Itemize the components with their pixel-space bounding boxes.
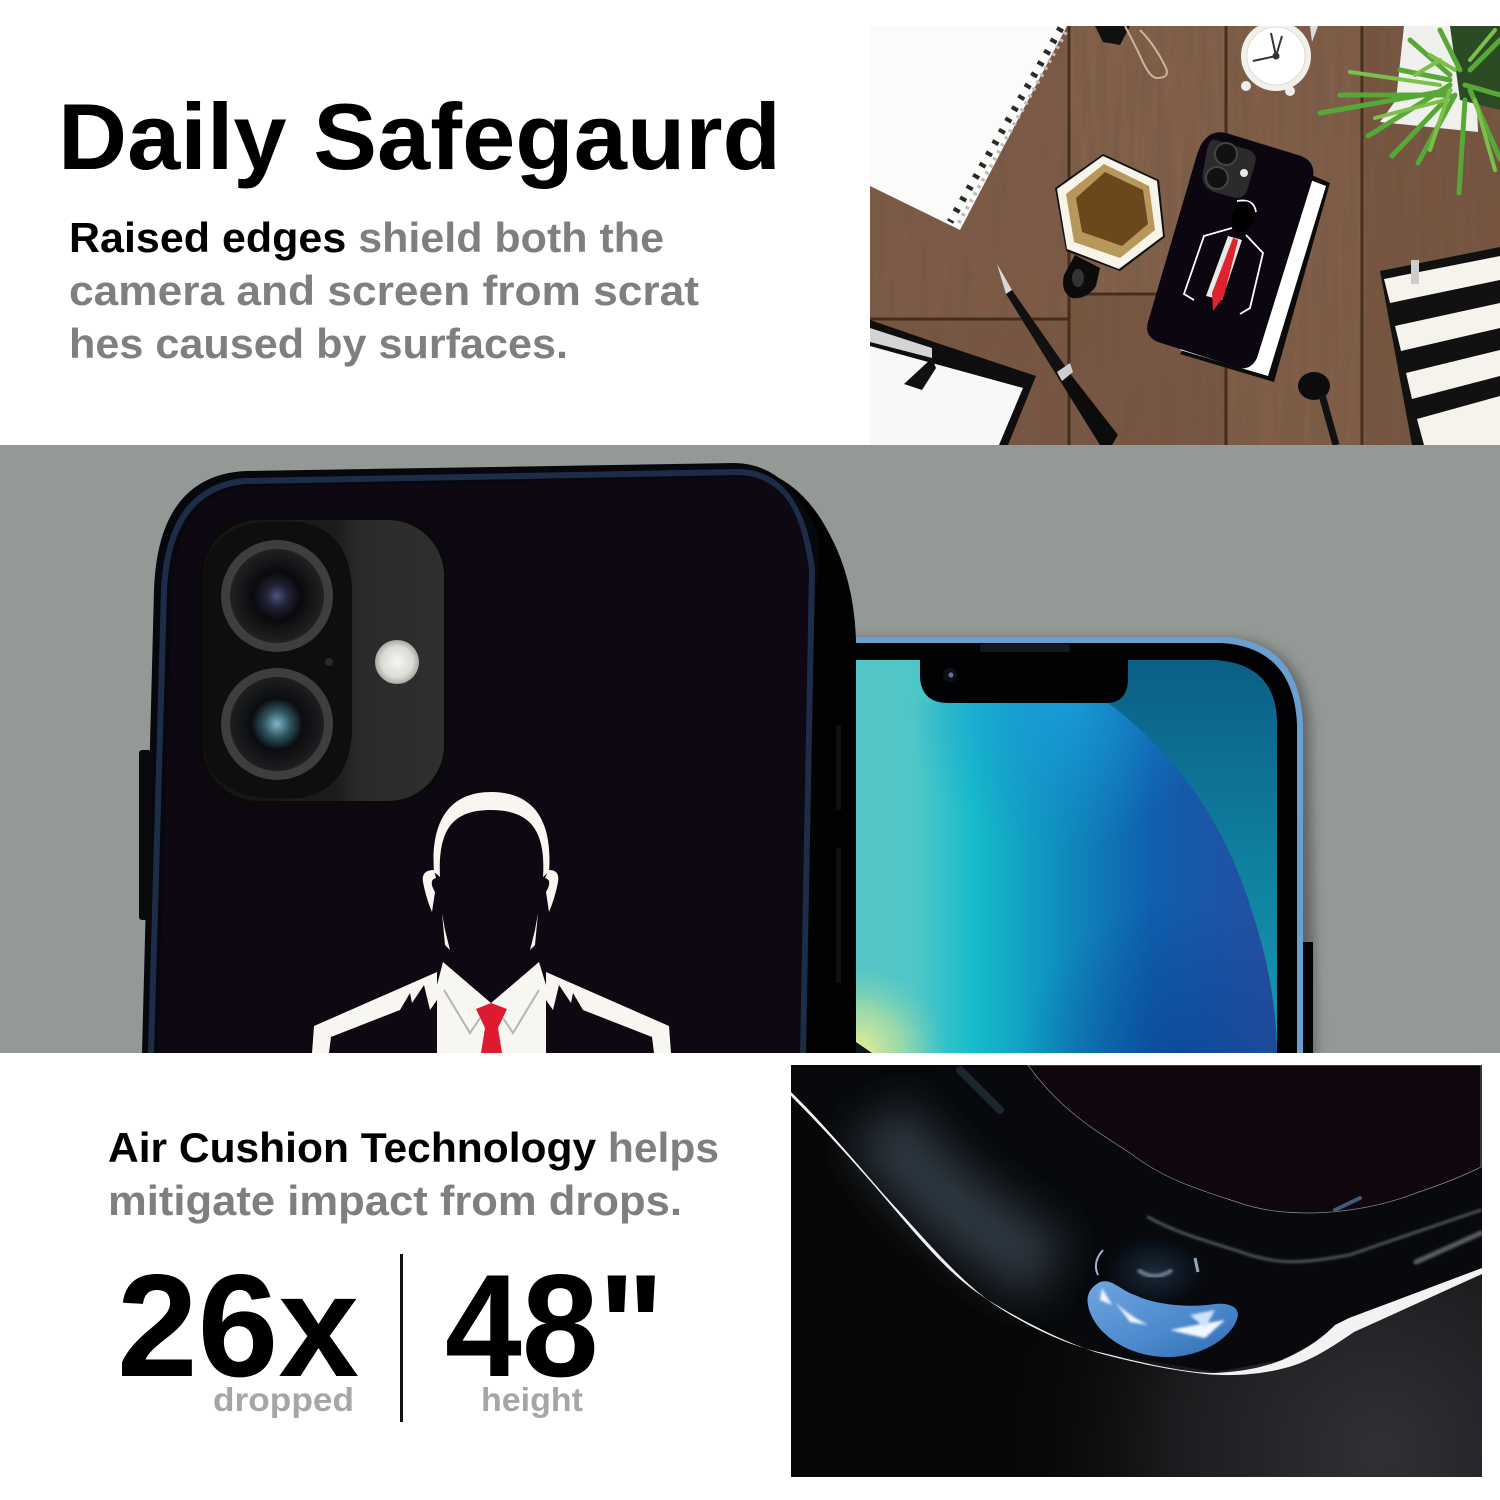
- text block: raised edges: hes caused by surfaces.: [69, 320, 568, 367]
- text block: air cushion: Air Cushion Technology helps: [108, 1124, 719, 1171]
- front phone: [850, 637, 1316, 1060]
- divider: [400, 1254, 403, 1422]
- text block: air cushion: [108, 1124, 719, 1224]
- figure: [1184, 200, 1263, 314]
- bumper sheen: [880, 1120, 1050, 1270]
- device behind: [1180, 170, 1330, 382]
- text block: air cushion: mitigate impact from drops.: [108, 1177, 682, 1224]
- binder clip: [1095, 26, 1167, 78]
- text block: raised edges: Raised edges shield both the: [69, 214, 664, 261]
- figure silhouette: [312, 792, 671, 1053]
- clock: [1241, 21, 1318, 96]
- text block: raised edges: [69, 214, 699, 367]
- camera: [1202, 140, 1256, 198]
- bumper highlights: [960, 1070, 1481, 1262]
- earbud: [1298, 372, 1336, 445]
- camera module: [200, 517, 447, 806]
- stat: 48 inches height: height: [481, 1381, 583, 1418]
- panel: grey band with phones: [0, 445, 1500, 1060]
- pen: [997, 264, 1118, 445]
- back phone: [139, 463, 856, 1053]
- stat: 26x dropped: dropped: [213, 1381, 354, 1418]
- screen: [920, 660, 1277, 1052]
- white rim line: [791, 1092, 1482, 1375]
- small phone on case: [1147, 132, 1330, 382]
- wood planks: [870, 26, 1500, 445]
- case back: [1147, 132, 1313, 368]
- stat: 48 inches height: 48": [445, 1244, 664, 1407]
- stat: 26x dropped: 26x: [117, 1244, 359, 1407]
- water droplet: [1088, 1238, 1238, 1357]
- panel: desk lifestyle photo: [870, 21, 1500, 445]
- text block: raised edges: camera and screen from scrat: [69, 267, 699, 314]
- coffee cup: [1055, 154, 1165, 298]
- title: Daily Safegaurd: [58, 84, 781, 189]
- clipboard: [870, 320, 1036, 445]
- notebook: [870, 26, 1067, 230]
- striped notebook: [1380, 247, 1500, 445]
- screen glass: [1028, 1065, 1481, 1213]
- plant: [1320, 26, 1500, 193]
- red tie: [476, 1003, 507, 1053]
- panel: raised edge close-up: [791, 1065, 1482, 1477]
- bumper body: [1129, 1188, 1482, 1372]
